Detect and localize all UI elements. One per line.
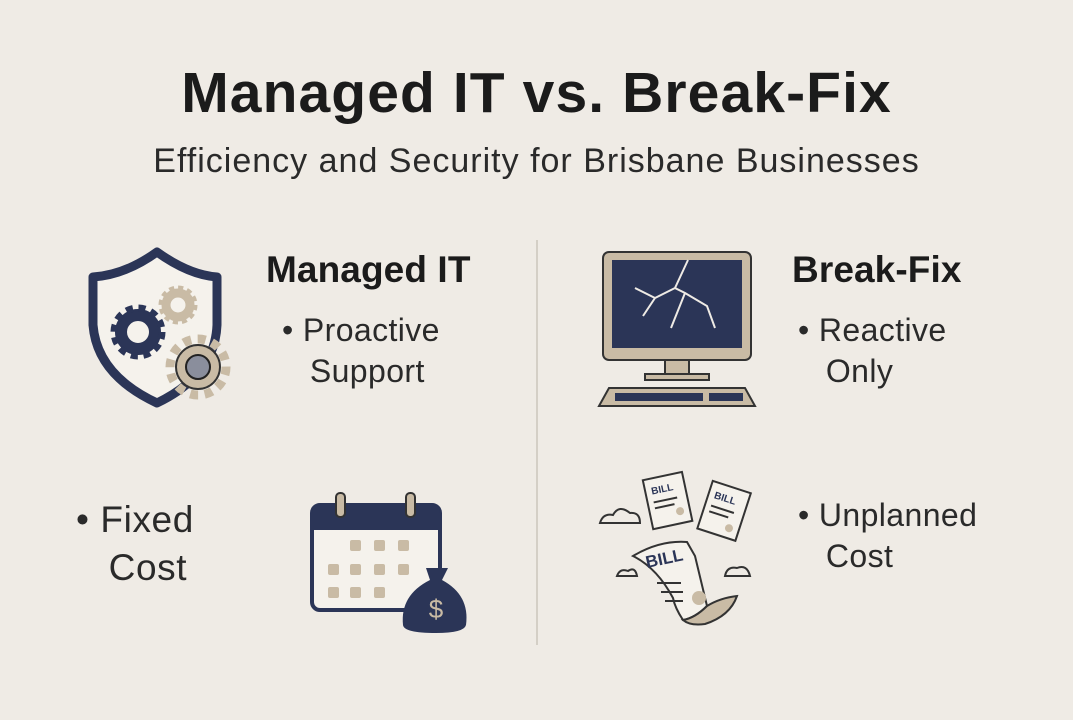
icon: broken computer — [597, 251, 757, 407]
icon: flying bills: BILL — [650, 482, 674, 498]
bullet: Reactive Only — [798, 312, 947, 389]
heading: Break-Fix: Break-Fix — [792, 249, 962, 290]
icon: flying bills: BILL — [713, 490, 737, 508]
icon: flying bills — [598, 470, 752, 626]
bullet: Proactive Support — [282, 312, 440, 389]
bullet: Unplanned Cost: Cost — [826, 538, 893, 574]
divider — [536, 240, 538, 645]
bullet: Unplanned Cost — [798, 497, 977, 574]
icon: flying bills: BILL — [644, 545, 685, 572]
heading: Managed IT: Managed IT — [266, 249, 471, 290]
bullet: Fixed Cost — [76, 499, 194, 588]
title: Managed IT vs. Break-Fix — [181, 61, 892, 125]
icon: calendar with money bag — [310, 492, 466, 633]
icon: calendar with money bag: $ — [429, 594, 444, 624]
bullet: Reactive Only: • Reactive — [798, 312, 947, 348]
icon: shield with gears — [88, 247, 230, 408]
bullet: Reactive Only: Only — [826, 353, 893, 389]
bullet: Fixed Cost: • Fixed — [76, 499, 194, 540]
bullet: Proactive Support: Support — [310, 353, 425, 389]
subtitle: Efficiency and Security for Brisbane Businesses — [153, 142, 920, 180]
bullet: Fixed Cost: Cost — [109, 547, 187, 588]
bullet: Proactive Support: • Proactive — [282, 312, 440, 348]
bullet: Unplanned Cost: • Unplanned — [798, 497, 977, 533]
